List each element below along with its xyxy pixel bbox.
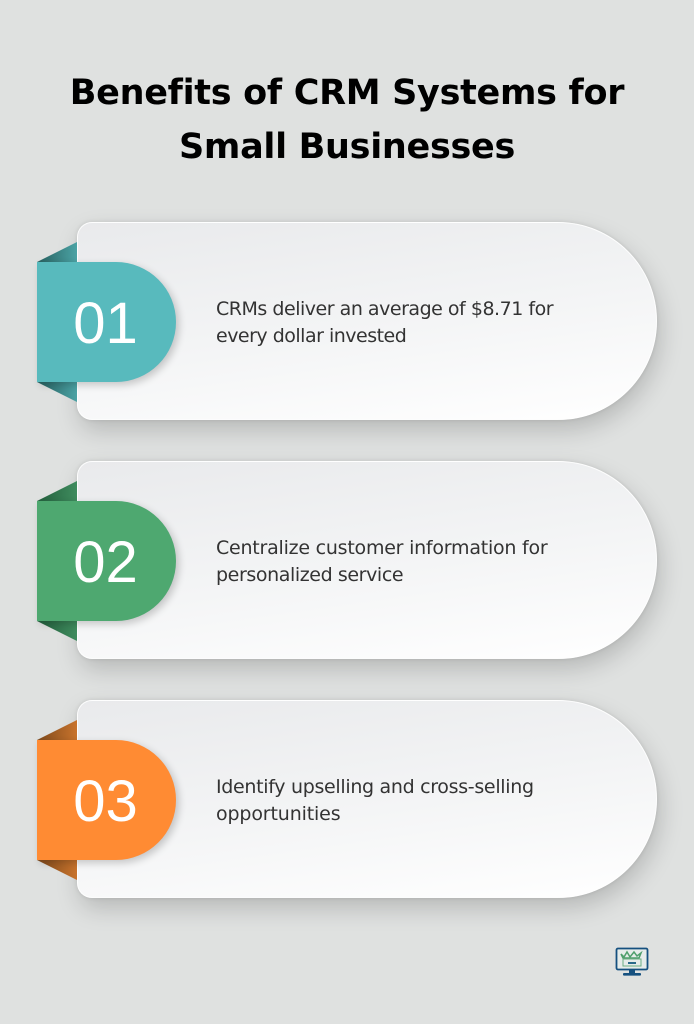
number tab 03 <box>37 740 176 860</box>
ribbon folds 01 <box>37 242 77 402</box>
text 03 <box>216 776 534 825</box>
icon: monitor logo <box>616 948 648 976</box>
card 02 <box>77 461 657 659</box>
text 02: Centralize customer information for <box>216 537 547 559</box>
text 02: personalized service <box>216 564 403 586</box>
title <box>70 73 624 167</box>
number 01: 01 <box>73 290 138 356</box>
text 02 <box>216 537 548 586</box>
text 03: opportunities <box>216 803 340 825</box>
panel: benefit 02 <box>36 458 668 678</box>
text 03: Identify upselling and cross-selling <box>216 776 534 798</box>
number tab 01 <box>37 262 176 382</box>
title: Benefits of CRM Systems for <box>70 73 624 113</box>
panel: benefit 03 <box>36 698 668 918</box>
ribbon folds 03 <box>37 720 77 880</box>
card 03 <box>77 700 657 898</box>
number 03: 03 <box>73 769 138 834</box>
panel: benefit 01 <box>36 220 668 440</box>
card 01 <box>77 222 657 420</box>
title: Small Businesses <box>179 127 515 167</box>
number 02: 02 <box>73 530 138 595</box>
text 01 <box>216 298 554 347</box>
ribbon folds 02 <box>37 481 77 641</box>
number tab 02 <box>37 501 176 621</box>
text 01: CRMs deliver an average of $8.71 for <box>216 298 553 320</box>
text 01: every dollar invested <box>216 325 406 347</box>
